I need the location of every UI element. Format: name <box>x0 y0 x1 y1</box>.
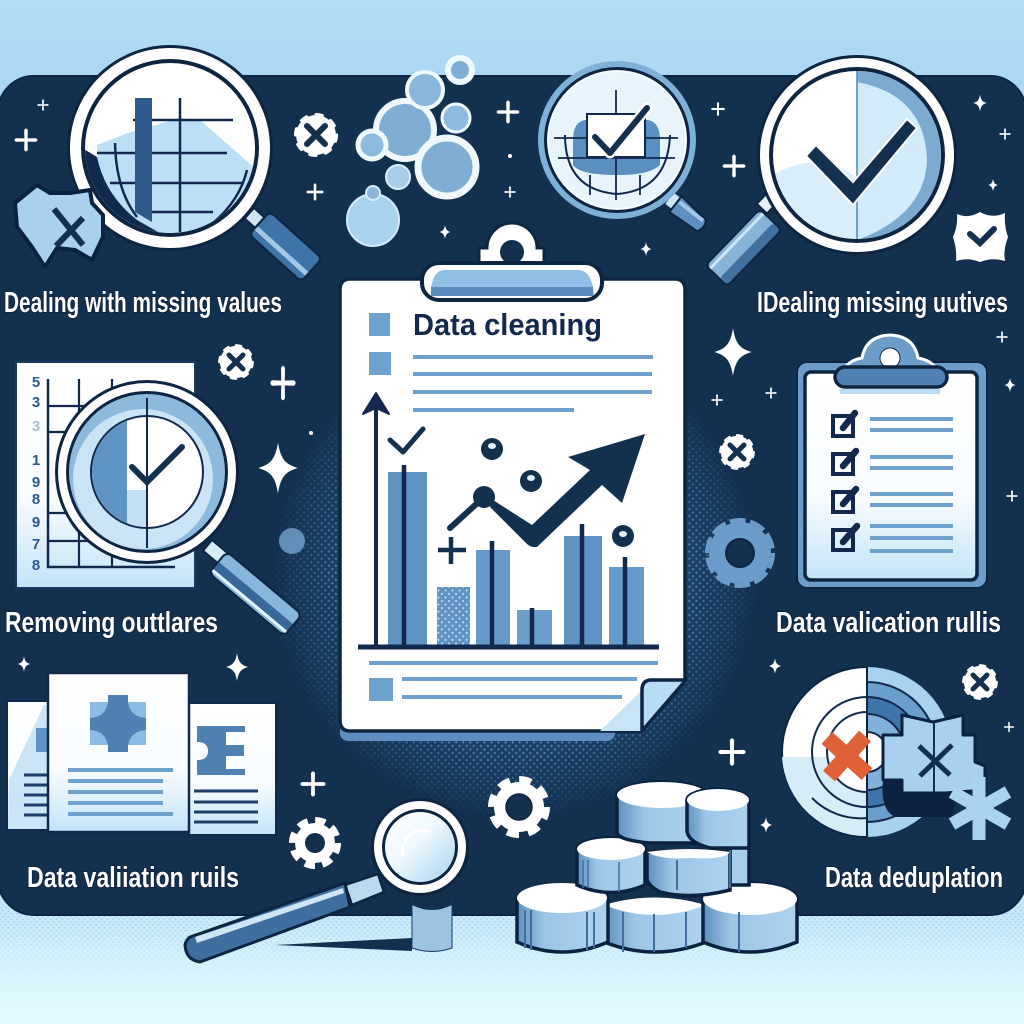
asterisk <box>952 777 1008 840</box>
large handle <box>704 192 783 287</box>
floor magnifier <box>185 798 469 962</box>
magnifier: missing values <box>67 45 323 283</box>
row numbers: 7 <box>32 536 40 553</box>
magnifier: large check <box>704 55 957 287</box>
clipboard title: Data cleaning <box>413 307 602 342</box>
page corner fold <box>600 680 686 731</box>
bottom middle disc <box>604 898 706 952</box>
badge icons with X and check <box>219 115 1008 699</box>
gear icon: white right <box>492 780 546 834</box>
label: data valiiation ruils: Data valiiation ruils <box>27 862 239 894</box>
row numbers: 8 <box>32 491 40 508</box>
label: removing outtlares: Removing outtlares <box>5 607 218 639</box>
checkbox rows <box>833 413 857 550</box>
bottom right disc <box>703 883 797 952</box>
top left disc <box>617 782 707 843</box>
documents with puzzle pieces <box>7 673 276 835</box>
puzzle piece <box>883 715 985 793</box>
decorative sparkles <box>14 95 1018 833</box>
right checklist clipboard <box>797 335 987 588</box>
puzzle shadow <box>882 780 960 817</box>
lens content <box>549 72 685 208</box>
row numbers: 5 <box>32 374 40 391</box>
floor shadow <box>275 938 412 951</box>
halftone halo behind clipboard <box>276 416 754 810</box>
bar chart with trend arrow <box>358 393 659 647</box>
halftone blot <box>279 528 305 554</box>
gear icon: blue <box>707 520 773 586</box>
text placeholder lines <box>369 313 658 701</box>
top right disc <box>687 789 749 848</box>
checklist lines <box>870 417 953 553</box>
left data table with magnifier <box>16 362 303 637</box>
background: bottom floor band <box>0 880 1024 1024</box>
bubbles cluster <box>347 58 476 246</box>
lens interior <box>90 415 205 530</box>
small handle <box>663 191 710 234</box>
left document <box>7 701 51 830</box>
lens with check <box>770 70 947 240</box>
middle document <box>48 673 189 832</box>
magnifier handle <box>203 540 303 637</box>
middle right disc <box>647 845 749 896</box>
lens with grid <box>85 63 255 233</box>
label: dealing with missing values: Dealing with missing values <box>4 287 282 319</box>
target left half <box>781 666 867 838</box>
puzzle piece with X <box>15 185 103 267</box>
magnifier handle <box>245 208 323 283</box>
bottom left disc <box>517 883 608 952</box>
row numbers: 3 <box>32 418 40 435</box>
row numbers: 3 <box>32 394 40 411</box>
handle <box>185 874 384 962</box>
clipboard clip <box>835 335 947 394</box>
spreadsheet sheet <box>16 362 195 588</box>
middle left disc <box>577 838 645 892</box>
gear icon: white left <box>293 821 337 865</box>
row numbers: 1 <box>32 452 40 469</box>
row numbers: 8 <box>32 557 40 574</box>
row numbers: 9 <box>32 474 40 491</box>
right document <box>189 703 276 835</box>
target with red X and puzzle <box>782 667 1008 840</box>
red X <box>809 718 885 794</box>
central clipboard document <box>340 223 686 741</box>
row numbers: 9 <box>32 514 40 531</box>
magnifier: top centre check <box>538 61 710 234</box>
row numbers <box>32 374 40 574</box>
stand <box>412 885 452 952</box>
target right half <box>868 667 945 837</box>
background: top sky band <box>0 0 1024 120</box>
clipboard clip <box>422 223 602 300</box>
stacked database discs <box>517 782 797 952</box>
